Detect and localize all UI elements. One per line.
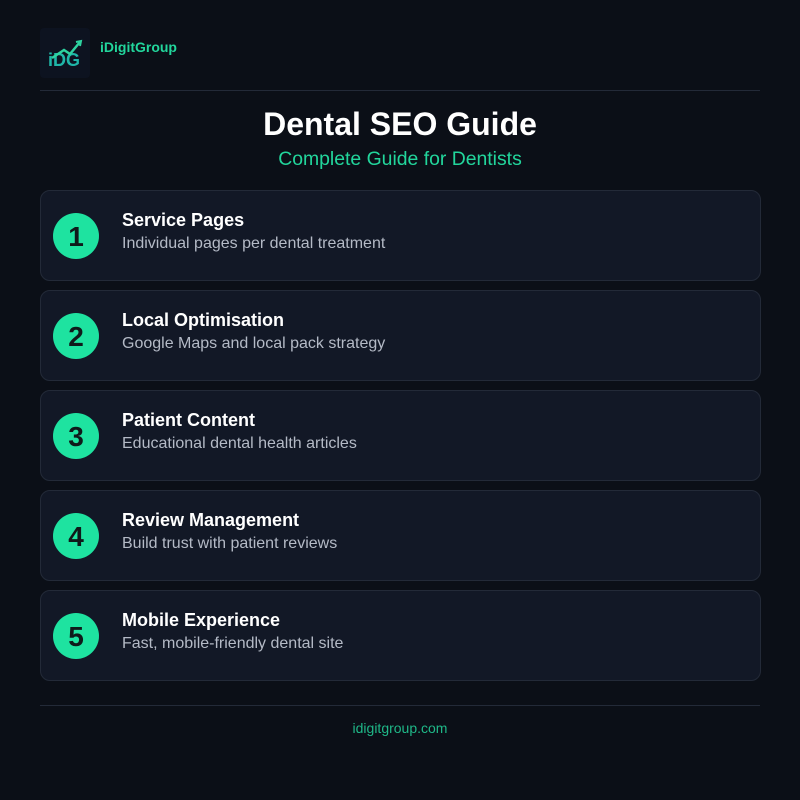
- card 3: Patient Content: [122, 410, 255, 430]
- logo: [40, 28, 90, 78]
- card 5: 5: [68, 621, 84, 652]
- card 4: 4: [68, 521, 84, 552]
- brand name: iDigitGroup: [100, 39, 177, 55]
- card 1: Individual pages per dental treatment: [122, 235, 385, 252]
- card 2: Google Maps and local pack strategy: [122, 335, 385, 352]
- card 1: Service Pages: [122, 210, 244, 230]
- title: Dental SEO Guide: [263, 106, 537, 142]
- subtitle: Complete Guide for Dentists: [278, 148, 522, 170]
- card 1: [40, 190, 761, 281]
- card 5: Mobile Experience: [122, 610, 280, 630]
- card 3: Educational dental health articles: [122, 435, 357, 452]
- card 4: [40, 490, 761, 581]
- card 2: [40, 290, 761, 381]
- card 1: 1: [68, 221, 84, 252]
- card 4: Review Management: [122, 510, 299, 530]
- card 3: [40, 390, 761, 481]
- logo: iDG: [48, 50, 80, 70]
- card 4: Build trust with patient reviews: [122, 535, 337, 552]
- card 3: 3: [68, 421, 84, 452]
- card 5: [40, 590, 761, 681]
- card 2: 2: [68, 321, 84, 352]
- card 5: Fast, mobile-friendly dental site: [122, 635, 343, 652]
- card 2: Local Optimisation: [122, 310, 284, 330]
- footer: idigitgroup.com: [353, 720, 447, 736]
